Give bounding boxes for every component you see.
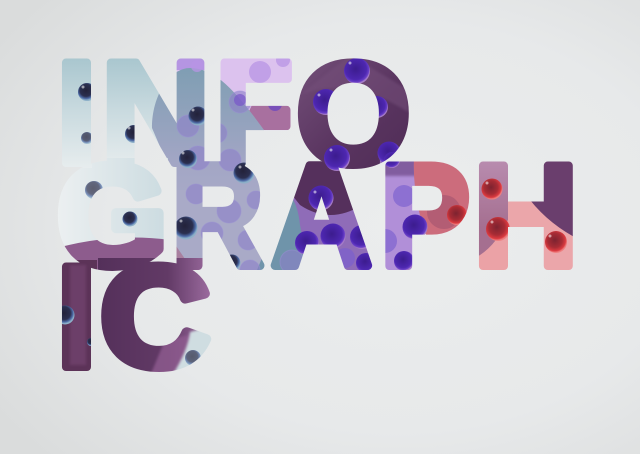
P bowl pink <box>414 162 470 235</box>
pale blue tissue region <box>62 58 159 152</box>
sphere highlights <box>82 62 552 238</box>
purple spheres <box>295 58 428 273</box>
R mauve foot <box>176 246 184 258</box>
A blue foot <box>257 200 304 270</box>
G pale half <box>50 158 168 245</box>
G plum lower part <box>64 238 164 270</box>
pale violet cells on P and A <box>335 185 415 268</box>
lilac cells <box>191 53 290 111</box>
lilac top-right region <box>176 58 292 130</box>
H right plum <box>531 202 573 236</box>
C pale corner <box>173 330 212 370</box>
title image fill clipped to the word INFOGRAPHIC <box>40 50 580 376</box>
IC plum <box>55 260 97 376</box>
translucent purple cells <box>177 91 304 280</box>
H base <box>478 162 508 256</box>
blue-violet region <box>152 68 264 190</box>
red spheres <box>447 178 567 253</box>
O plum <box>296 56 412 172</box>
P stem lilac <box>380 160 420 275</box>
A plum and lilac <box>293 198 368 270</box>
dark blue spheres <box>56 83 254 366</box>
